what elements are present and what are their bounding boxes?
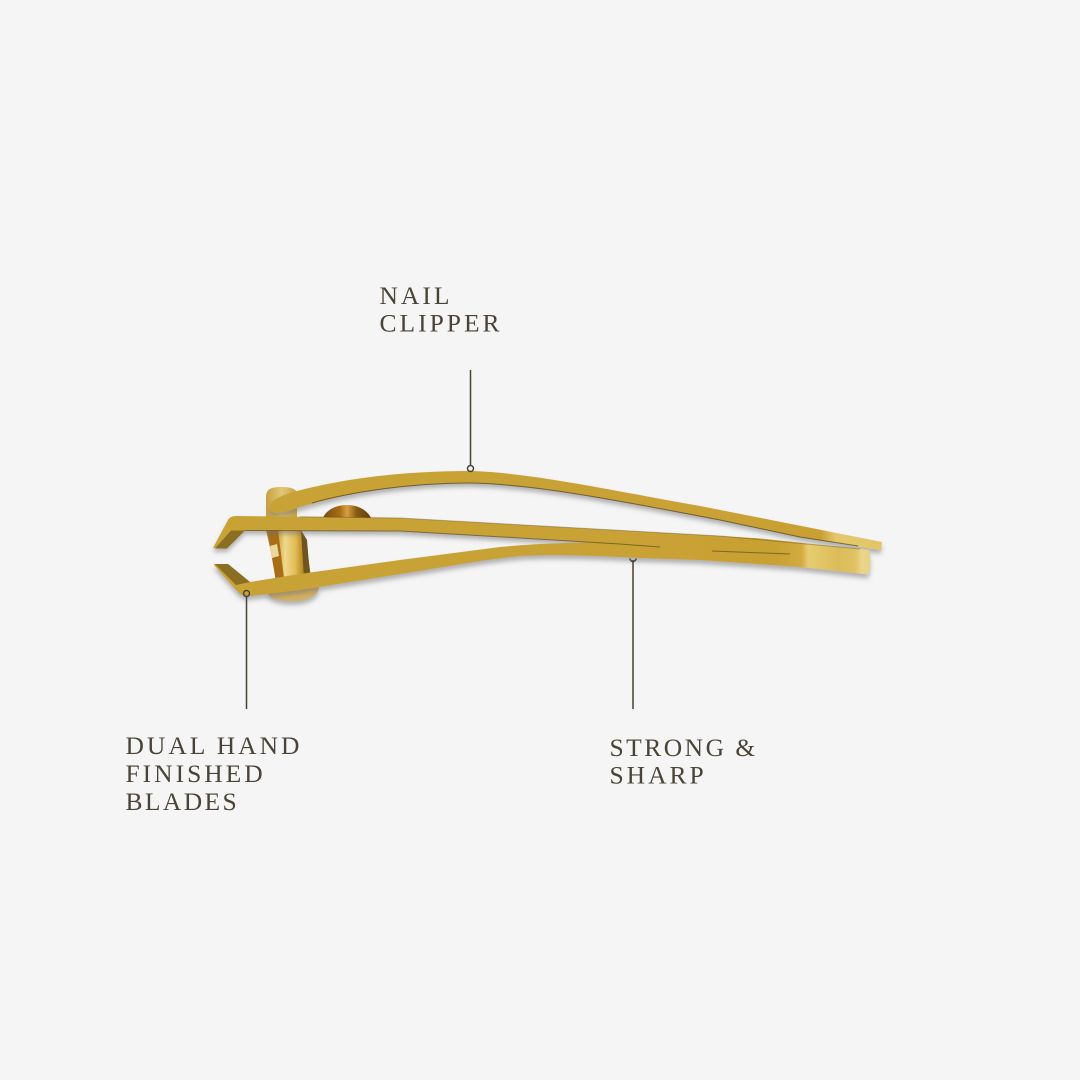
leader line	[468, 370, 474, 472]
leader line	[244, 590, 250, 709]
top lever dark underside	[312, 483, 858, 546]
label: SHARP	[610, 760, 707, 790]
dome rivet	[323, 505, 371, 518]
callout: nail clipper	[380, 281, 503, 472]
label: STRONG &	[610, 733, 758, 762]
middle blade arm	[213, 516, 869, 562]
label: FINISHED	[126, 759, 266, 788]
lower and middle blade arms	[213, 516, 870, 596]
middle arm top edge	[300, 517, 860, 549]
screw head	[267, 587, 319, 601]
blade seam	[245, 530, 790, 554]
callout: dual hand finished blades	[126, 590, 302, 816]
label: CLIPPER	[380, 308, 503, 338]
pivot post	[266, 487, 311, 582]
top lever arm	[270, 471, 882, 550]
lower jaw inner bevel	[215, 564, 250, 585]
label: NAIL	[380, 281, 452, 310]
bottom blade arm	[214, 535, 870, 596]
nail clipper product image	[213, 471, 882, 601]
label: BLADES	[126, 787, 239, 816]
callout: strong and sharp	[610, 558, 758, 790]
upper jaw inner bevel	[215, 530, 245, 548]
leader line	[630, 558, 636, 709]
label: DUAL HAND	[126, 731, 302, 760]
